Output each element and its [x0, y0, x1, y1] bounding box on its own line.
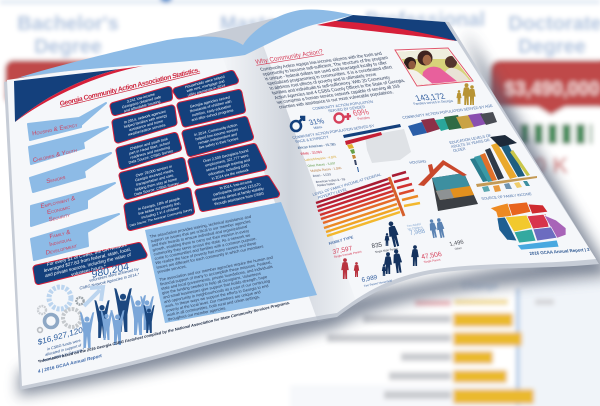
- box 8: [186, 120, 250, 153]
- chart: population by race and ethnicity: Multiple Races - 1,590: [310, 166, 342, 173]
- box 3: readiness and mentoring: [130, 145, 170, 160]
- stat: CSBG funds $16,927,120: in CSBG funds were: [47, 339, 81, 351]
- box 8: live safely in their homes: [199, 137, 239, 150]
- box 4: helping them stay at home: [135, 177, 177, 192]
- association text block: provide services.: [157, 263, 187, 274]
- icon: male symbol: [291, 117, 304, 131]
- figure: two parent household: [361, 249, 403, 288]
- callout: housing and energy: Housing & Energy: [32, 122, 78, 138]
- figure: two parent household: Two Parent Household: [363, 278, 393, 288]
- blurred background infographic: Professional: [365, 9, 485, 31]
- stat: CSBG funds $16,927,120: [37, 325, 85, 363]
- chart: population by gender: Females: [357, 116, 371, 121]
- figure: single male parent: Single Male Parent: [374, 247, 398, 254]
- leverage callout box: leveraged $27.83 from federal, state, local,: [44, 246, 131, 273]
- figure: single male parent: [371, 220, 401, 254]
- box 7: thousands of children with: [190, 99, 232, 113]
- chart: population by race and ethnicity: African American - 70,780: [297, 142, 336, 150]
- association text block: work in all communities, both rural and urban settings,: [166, 294, 260, 317]
- cover swoosh: light blue: [17, 9, 353, 78]
- box 7: Georgia agencies served: [189, 95, 230, 109]
- intro paragraph: Action Agencies and 4 CSBG County Offices in the State of Georgia,: [273, 78, 406, 100]
- chart: population by age: [402, 104, 497, 136]
- box 7: and after-school programs: [191, 108, 234, 122]
- box 10: through assistance from CSBG: [214, 191, 265, 206]
- figure: other: 1,496: [449, 240, 465, 248]
- association text block: growth, enabling them to carry out their mission in every: [152, 228, 249, 252]
- callout: seniors: [30, 153, 111, 192]
- stat: volunteers 980,204: 980,204: [91, 262, 130, 281]
- box 7: nutrition, early education: [192, 104, 231, 117]
- figure: single male parent: 835: [371, 241, 383, 250]
- stat: CSBG funds $16,927,120: $16,927,120: [37, 325, 84, 347]
- blurred background infographic: $3,490,000: [504, 79, 600, 100]
- box 5: live below the poverty line,: [138, 201, 181, 216]
- stat: families served: [413, 91, 454, 106]
- right page footer: 2016 GCAA Annual Report | 3: [529, 247, 591, 256]
- figure: single parent: [411, 245, 443, 266]
- box 4: [122, 161, 185, 197]
- box 9: education, including GED,: [208, 163, 250, 177]
- intro paragraph: is unique - federal dollars are used and leveraged locally to offer: [264, 60, 388, 81]
- callout: housing and energy: [28, 103, 106, 140]
- box 1: [114, 90, 169, 114]
- box 10: services aimed at family stability: [212, 187, 264, 202]
- figure: single parent: 47,506: [421, 251, 443, 261]
- box 5: including 1 in 4 children: [141, 206, 179, 220]
- box 1: and affordable housing: [124, 100, 161, 113]
- chart: population by race and ethnicity: Asian - 1,033: [312, 172, 332, 178]
- callout: family and individual development: Development: [45, 242, 78, 257]
- box 3: Data Source: CSBG Survey: [128, 149, 173, 165]
- chart: family income relative to poverty level: POVERTY LEVEL: [317, 187, 348, 200]
- box 4: Data Source: CSBG Survey: [134, 181, 179, 197]
- chart: source of family income map: SOURCE OF FAMILY INCOME: [481, 192, 533, 201]
- icon: gold family: [456, 83, 476, 105]
- association text block: come to communities and families with a common purpose.: [154, 236, 257, 261]
- race bars: [343, 124, 401, 138]
- box 9: Over 2,500 Georgians found: [203, 149, 249, 163]
- chart: family income relative to poverty level: LEVEL OF FAMILY INCOME AT FEDERAL: [312, 173, 382, 197]
- leverage callout box: [36, 241, 144, 284]
- box 2: [116, 108, 174, 140]
- chart: population by race and ethnicity: Alaska Native: [316, 182, 336, 187]
- intro paragraph: to address root effects of poverty and to ultimately move: [269, 72, 378, 91]
- box 3: part in Head Start, school: [129, 141, 170, 156]
- box 8: helped low-income seniors: [195, 127, 239, 141]
- box 10: participants obtained 123,670: [213, 182, 261, 197]
- chart: population by gender: COMMUNITY ACTION POPULATION: [312, 100, 374, 111]
- box 6: [176, 74, 235, 98]
- box 4: transportation and care,: [136, 173, 174, 187]
- leverage callout box: and private sources, including the value of: [45, 252, 132, 278]
- figure: two adults no children: No Children: [407, 225, 423, 231]
- leverage callout box: For every $1 of CSBG, the GA Network: [47, 242, 127, 267]
- callout: employment and economic security: Security: [48, 211, 71, 224]
- photo: family: [394, 48, 474, 86]
- chart: population by race and ethnicity: Other Races - 3,497: [307, 161, 336, 168]
- figure: other: Other: [454, 246, 462, 251]
- box 10: [198, 177, 276, 208]
- blurred background infographic: Degree: [34, 36, 102, 58]
- heading: education levels: ADULTS 24 YEARS OR: [451, 138, 491, 149]
- association text block: [145, 202, 317, 323]
- association text block: and small businesses give support that builds strength, hope: [163, 274, 268, 300]
- box 6: Households were helped: [185, 75, 225, 89]
- box 8: remain independent and: [198, 132, 238, 145]
- association text block: poverty at the local level. Our members are unique and: [165, 289, 261, 313]
- chart: population by gender: [291, 100, 376, 131]
- chart: population by gender: Males: [313, 125, 323, 130]
- intro paragraph: counties with assistance to our most vulnerable populations.: [278, 89, 394, 110]
- chart: population by race and ethnicity: RACE & ETHNICITY: [295, 135, 330, 144]
- box 4: Over 28,000 seniors in: [135, 164, 172, 178]
- cover swoosh: navy and red, left page: [14, 66, 143, 122]
- box 2: weatherization services: [128, 123, 166, 137]
- association text block: give the funding needed to help all Georgians. Volunteers: [162, 271, 261, 295]
- stat: volunteers 980,204: volunteers were achieved by: [89, 266, 139, 283]
- icon: bookshelf and graduation cap: [470, 135, 537, 192]
- box 7: [180, 93, 242, 124]
- association text block: and their boards to ensure individual and organizational: [151, 224, 248, 248]
- category callouts: [28, 103, 119, 260]
- box 9: in 2014 via the network: [211, 168, 249, 181]
- box 5: In Georgia, 18% of people: [138, 197, 180, 211]
- box 6: with rent, mortgage and: [186, 79, 225, 93]
- cover swoosh: navy and red, right page: [317, 15, 457, 41]
- stat: volunteers 980,204: [79, 262, 140, 291]
- intro paragraph: families and individuals to self-sufficiency. With 20 Community: [271, 75, 391, 95]
- callout: seniors: Seniors: [46, 174, 66, 185]
- box 3: [120, 136, 178, 166]
- figure: two parent household: 6,989: [361, 274, 378, 284]
- figure: single female parent: 37,597: [332, 245, 353, 256]
- box 2: helped families with energy: [124, 113, 168, 129]
- chart: source of family income map: [481, 192, 566, 250]
- association text block: work. In these ways we support the efforts in Georgia to end: [164, 283, 269, 309]
- chart: population by race and ethnicity: White - 33,694: [300, 150, 323, 156]
- stat: families served: 143,172: [413, 91, 447, 103]
- heading: education levels: EDUCATION LEVELS OF: [449, 134, 492, 145]
- box 5: Data Source: The American Community Survey: [129, 207, 193, 228]
- left page footer: 4 | 2016 GCAA Annual Report: [38, 353, 102, 374]
- intro paragraph: we comprise a human service network capable of serving all 159: [276, 84, 401, 105]
- callout: employment and economic security: Economic: [47, 204, 71, 216]
- box 5: [127, 191, 193, 228]
- blurred background infographic: Degree: [518, 36, 586, 58]
- callout: family and individual development: [31, 214, 119, 260]
- heading: Georgia statistics: Georgia Community Action Association Statistics.: [59, 67, 200, 108]
- box 1: Georgians obtained safe: [122, 95, 161, 109]
- figure: single female parent: Single Female Parent: [333, 249, 362, 259]
- statistic boxes: left column: [114, 90, 193, 228]
- callout: family and individual development: Family &: [49, 229, 71, 240]
- chart: population by age: COMMUNITY ACTION POPULATION SERVED BY AGE: [402, 104, 494, 120]
- association text block: issues are different for each community in which our members: [156, 244, 264, 270]
- figure: single parent: Single Parent: [423, 258, 441, 264]
- association text block: We realize the face of poverty has many causes and these: [155, 240, 258, 265]
- figure: single female parent: [332, 245, 362, 279]
- chart: population by race and ethnicity: [292, 124, 411, 187]
- statistic boxes: right column: [176, 74, 276, 208]
- blurred background infographic: Master's: [220, 13, 300, 35]
- box 1: 3,241 low-income: [127, 92, 155, 104]
- box 2: In 2014, network agencies: [124, 109, 166, 125]
- chart: population by race and ethnicity: American Indian & - 93: [315, 177, 346, 184]
- map: Georgia, gray: [365, 129, 411, 163]
- figure: two adults no children: Two Adults/: [406, 222, 422, 228]
- box 8: In 2014, Community Action: [194, 123, 238, 137]
- box 4: Georgia received meals,: [135, 169, 174, 183]
- icon: female symbol: [334, 113, 351, 122]
- chart: population by gender: 69%: [351, 107, 370, 118]
- blurred background infographic: 40 K: [522, 153, 568, 178]
- box 9: served through training and: [206, 158, 250, 172]
- icon: gears and arrow: [38, 287, 103, 332]
- heading: housing: HOUSING: [409, 159, 427, 165]
- association text block: throughout our member agencies.: [167, 305, 227, 322]
- callout: employment and economic security: [31, 183, 115, 226]
- chart: population by race and ethnicity: Latino/Hispanic - 4,876: [304, 155, 337, 162]
- icon: house: [418, 160, 478, 211]
- heading: education levels: OLDER: [452, 147, 467, 153]
- box 3: Children and youth took: [130, 137, 168, 151]
- callout: family and individual development: Individual: [49, 236, 73, 248]
- figure: two adults no children: [406, 218, 446, 238]
- callout: employment and economic security: Employment &: [40, 195, 75, 210]
- leverage callout box: volunteer hours.*: [71, 264, 106, 277]
- intro paragraph: specialized programming in communities. It is a coordinated effort: [266, 64, 394, 86]
- figure: two adults no children: 7,988: [409, 228, 427, 237]
- association text block: community they serve across the state. As a network we: [153, 232, 252, 257]
- association text block: state and local governments, private foundations, and individuals: [161, 264, 273, 291]
- chart: population by gender: SERVED BY GENDER: [327, 105, 366, 113]
- association text block: and opportunity in neighbourhoods as a part of our continuing: [163, 278, 270, 304]
- callout: children and youth: Children & Youth: [33, 147, 77, 164]
- chart: population by gender: 31%: [307, 116, 326, 127]
- association text block: The association and our member agencies require the human and: [159, 255, 273, 282]
- stat: volunteers 980,204: CSBG Network Agencies in 2014.*: [79, 271, 140, 291]
- chart: family type: [328, 218, 465, 288]
- intro paragraph: opportunity to become self-sufficient. The structure of the program: [261, 55, 389, 77]
- chart: family income relative to poverty level: [312, 172, 420, 236]
- stat: CSBG funds $16,927,120: allocated in support of: [45, 343, 82, 357]
- footnote: *Information based on the 2016 Georgia CSBG Factsheet compiled by the National Association for State Community Services Programs.: [38, 300, 290, 364]
- stat: families served: Families served in Georgia: [413, 99, 454, 106]
- blurred background infographic: Doctorate: [508, 13, 600, 35]
- stat: CSBG funds $16,927,120: local entities in Georgia.*: [43, 347, 85, 363]
- icon: cheering crowd: [80, 288, 155, 348]
- blurred background infographic: Bachelor's: [17, 13, 119, 35]
- blurred background infographic: Change: [462, 281, 499, 292]
- box 6: utility payments in 2014: [187, 83, 226, 97]
- callout: children and youth: [29, 127, 108, 164]
- box 2: assistance and home: [129, 119, 163, 132]
- association text block: The association provides training, technical assistance and: [149, 214, 251, 239]
- association text block: financial support of many to accomplish these missions. Federal,: [160, 259, 272, 287]
- box 9: employment, 321,777 were: [205, 153, 249, 168]
- chart: family type: FAMILY TYPE: [328, 234, 354, 246]
- chart: population by race and ethnicity: COMMUNITY ACTION POPULATION SERVED BY: [292, 124, 376, 140]
- intro paragraph: Community Action equips low-income citizens with the tools and: [259, 51, 383, 72]
- association text block: support on issues that are critical to our member agencies: [150, 219, 251, 243]
- box 9: [192, 147, 263, 182]
- heading: Why Community Action: Why Community Action?: [255, 48, 324, 66]
- box 10: In 2014, low-income: [219, 180, 252, 191]
